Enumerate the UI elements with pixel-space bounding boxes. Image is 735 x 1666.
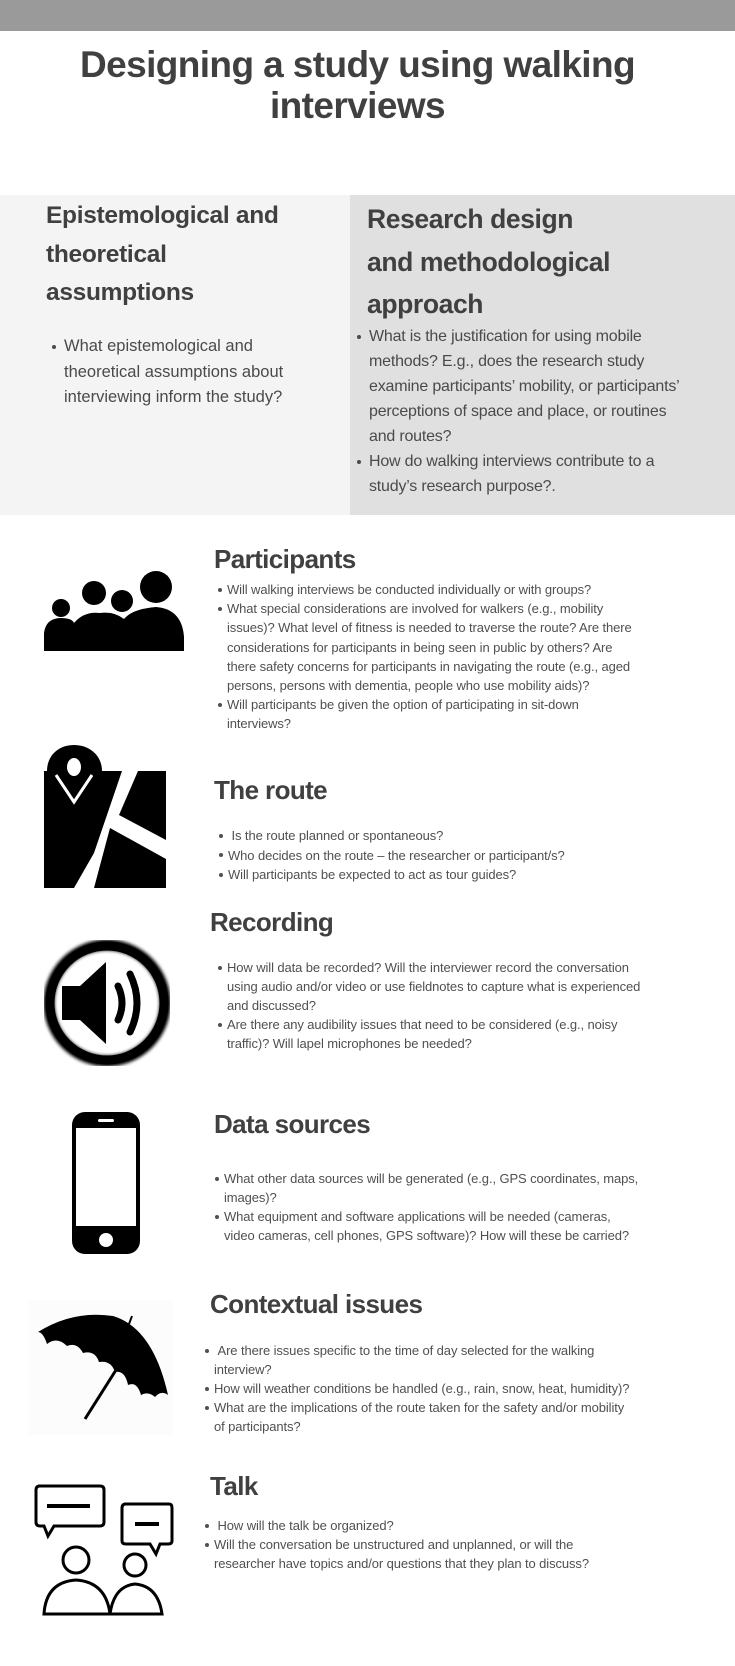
bullet text bbox=[52, 337, 284, 406]
bullets: research design: What is the justification for using mobile bbox=[369, 328, 642, 345]
bullets: recording: Are there any audibility issues that need to be considered (e.g., noisy bbox=[227, 1017, 617, 1032]
bullets: talk: How will the talk be organized? bbox=[218, 1518, 394, 1533]
icon: phone bbox=[72, 1112, 140, 1254]
bullets: contextual: interview? bbox=[214, 1362, 272, 1377]
bullets: research design: methods? E.g., does the research study bbox=[369, 353, 644, 370]
bullets: data sources: What equipment and software applications will be needed (cameras, bbox=[224, 1209, 611, 1224]
title bbox=[80, 44, 635, 126]
bullets: research design: How do walking interviews contribute to a bbox=[369, 453, 654, 470]
heading: epistemological: Epistemological and bbox=[46, 202, 279, 229]
heading: contextual issues: Contextual issues bbox=[210, 1289, 422, 1319]
bullets: recording: traffic)? Will lapel microphones be needed? bbox=[227, 1036, 472, 1051]
bullets: recording bbox=[218, 960, 640, 1051]
heading: epistemological: theoretical bbox=[46, 240, 167, 268]
bullets: contextual: What are the implications of the route taken for the safety and/or mobility bbox=[214, 1400, 624, 1415]
heading: epistemological: assumptions bbox=[46, 279, 194, 306]
heading: research design: approach bbox=[367, 289, 483, 319]
bullets: route: Will participants be expected to act as tour guides? bbox=[228, 867, 516, 882]
heading: participants: Participants bbox=[214, 544, 356, 574]
bullets: participants: persons, persons with dementia, people who use mobility aids)? bbox=[227, 678, 589, 693]
bullets: recording: using audio and/or video or use fieldnotes to capture what is experienced bbox=[227, 979, 640, 994]
top bar bbox=[0, 0, 735, 31]
heading: research design: Research design bbox=[367, 204, 573, 234]
heading: route: The route bbox=[214, 775, 327, 805]
bullets: contextual: of participants? bbox=[214, 1419, 301, 1434]
bullets: participants: What special considerations are involved for walkers (e.g., mobility bbox=[227, 601, 603, 616]
bullets: contextual: Are there issues specific to the time of day selected for the walking bbox=[218, 1343, 594, 1358]
bullets: research design bbox=[357, 328, 680, 495]
bullets: participants: Will walking interviews be conducted individually or with groups? bbox=[227, 582, 591, 597]
bullets: participants: there safety concerns for participants in navigating the route (e.g., aged bbox=[227, 659, 630, 674]
title: Designing a study using walking bbox=[80, 44, 635, 85]
heading: research design: and methodological bbox=[367, 246, 610, 276]
bullets: participants: interviews? bbox=[227, 716, 291, 731]
heading: data sources: Data sources bbox=[214, 1109, 370, 1139]
panel: epistemological bbox=[0, 195, 350, 515]
bullet text: What epistemological and bbox=[64, 337, 253, 355]
bullets: research design: and routes? bbox=[369, 428, 451, 445]
icon: talk bbox=[34, 1484, 174, 1616]
bullets: contextual bbox=[205, 1343, 629, 1434]
bullets: participants: considerations for participants in being seen in public by others? Are bbox=[227, 640, 612, 655]
panel: research design bbox=[350, 195, 735, 515]
bullet text: interviewing inform the study? bbox=[64, 388, 282, 406]
bullets: recording: and discussed? bbox=[227, 998, 316, 1013]
bullet text: theoretical assumptions about bbox=[64, 362, 283, 380]
title: interviews bbox=[270, 85, 445, 126]
bullets: route bbox=[219, 828, 565, 882]
bullets: recording: How will data be recorded? Will the interviewer record the conversation bbox=[227, 960, 629, 975]
heading: research design bbox=[367, 204, 610, 319]
bullets: participants: issues)? What level of fitness is needed to traverse the route? Are there bbox=[227, 620, 632, 635]
icon: route map bbox=[44, 745, 166, 888]
bullets: talk: Will the conversation be unstructured and unplanned, or will the bbox=[214, 1537, 573, 1552]
bullets: participants bbox=[218, 582, 632, 731]
bullets: data sources: video cameras, cell phones, GPS software)? How will these be carried? bbox=[224, 1228, 629, 1243]
bullets: research design: examine participants’ mobility, or participants’ bbox=[369, 378, 680, 395]
heading: epistemological bbox=[46, 202, 279, 306]
heading: talk: Talk bbox=[210, 1471, 258, 1501]
bullets: route: Who decides on the route – the researcher or participant/s? bbox=[228, 848, 565, 862]
icon: speaker bbox=[44, 940, 170, 1066]
icon: participants group bbox=[44, 571, 184, 651]
bullets: contextual: How will weather conditions be handled (e.g., rain, snow, heat, humidity)? bbox=[214, 1381, 629, 1396]
bullets: data sources: What other data sources will be generated (e.g., GPS coordinates, maps, bbox=[224, 1171, 638, 1186]
bullets: talk bbox=[205, 1518, 589, 1571]
bullets: research design: perceptions of space and place, or routines bbox=[369, 403, 666, 420]
bullets: research design: study’s research purpose?. bbox=[369, 478, 556, 495]
icon: umbrella bbox=[38, 1314, 168, 1420]
bullets: data sources bbox=[215, 1171, 638, 1243]
bullets: data sources: images)? bbox=[224, 1190, 277, 1205]
heading: recording: Recording bbox=[210, 907, 333, 937]
bullets: route: Is the route planned or spontaneous? bbox=[232, 828, 443, 843]
bullets: talk: researcher have topics and/or questions that they plan to discuss? bbox=[214, 1556, 589, 1571]
bullets: participants: Will participants be given the option of participating in sit-down bbox=[227, 697, 579, 712]
